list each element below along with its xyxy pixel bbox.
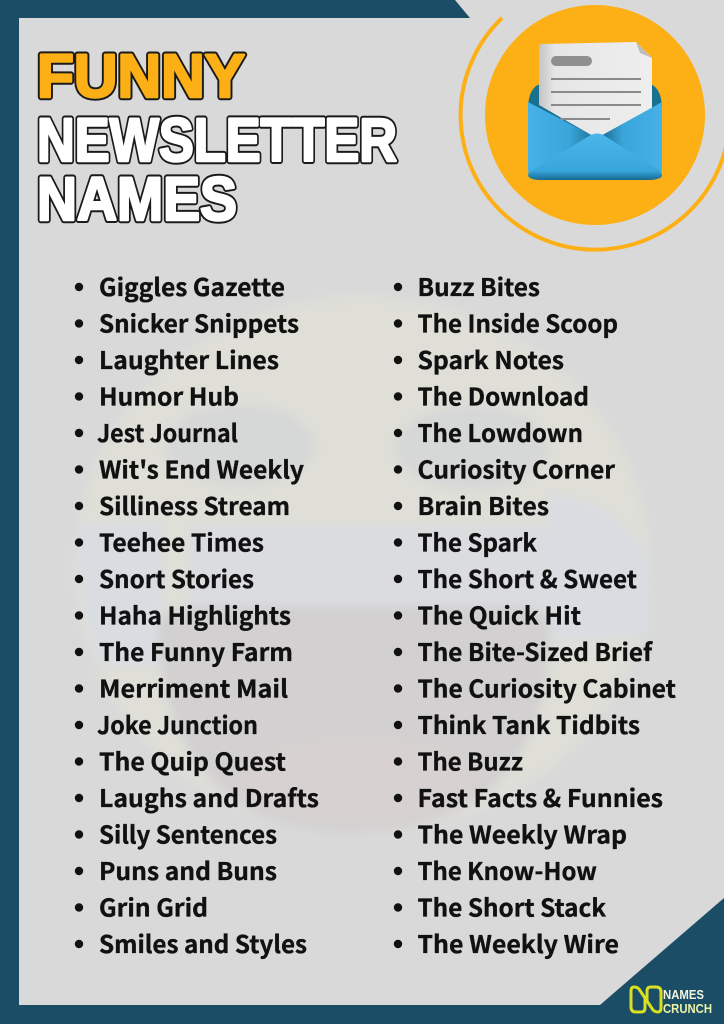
paper — [539, 42, 652, 140]
list: left column: Silly Sentences — [99, 816, 277, 852]
watermark: faint envelope emblem — [75, 297, 649, 833]
list: right column: The Know-How — [418, 853, 597, 888]
orange ring arc — [461, 18, 724, 250]
list: right column: The Buzz — [418, 744, 523, 778]
list: left column: Teehee Times — [99, 524, 264, 560]
list: right column: The Curiosity Cabinet — [418, 670, 676, 706]
list: right column: Curiosity Corner — [418, 452, 615, 486]
envelope front — [528, 134, 662, 180]
list: left column: Giggles Gazette — [99, 269, 285, 304]
envelope back — [528, 84, 662, 140]
list: left column: Haha Highlights — [99, 598, 291, 632]
title word: Funny: FUNNY — [37, 42, 245, 110]
title outlines — [37, 42, 397, 233]
logo: Names Crunch — [631, 987, 712, 1016]
list: left column: Snicker Snippets — [99, 306, 299, 340]
icon: newsletter envelope in orange circle — [461, 5, 724, 250]
list: left column: Joke Junction — [97, 707, 258, 742]
list: right column: The Lowdown — [418, 415, 583, 450]
list: left column — [75, 269, 319, 961]
title outlines: FUNNY — [37, 42, 245, 110]
title outlines: NAMES — [37, 165, 237, 233]
list: left column: The Quip Quest — [99, 744, 286, 778]
title outlines: NEWSLETTER — [37, 106, 397, 174]
list: left column: Merriment Mail — [99, 670, 288, 706]
list: right column: Think Tank Tidbits — [418, 707, 640, 742]
list: left column: Grin Grid — [99, 890, 208, 924]
envelope left flap — [528, 102, 597, 176]
list: right column: The Short & Sweet — [418, 561, 637, 596]
list: right column: The Spark — [418, 524, 537, 560]
list: right column: The Download — [418, 378, 589, 414]
list: left column: Jest Journal — [97, 415, 238, 450]
list: right column: Buzz Bites — [418, 269, 540, 304]
list: left column: Laughs and Drafts — [99, 780, 319, 815]
title word: Names: NAMES — [37, 165, 237, 233]
list: left column: Wit's End Weekly — [99, 452, 304, 486]
title — [37, 42, 397, 233]
list: left column: Humor Hub — [99, 378, 239, 414]
logo: Names Crunch: CRUNCH — [663, 1001, 712, 1016]
list: left column: The Funny Farm — [99, 634, 293, 669]
list: right column: The Short Stack — [418, 890, 606, 924]
list: left column: Puns and Buns — [99, 853, 277, 888]
list: right column: Spark Notes — [418, 342, 564, 377]
title word: Newsletter: NEWSLETTER — [37, 106, 397, 174]
list: right column: The Inside Scoop — [418, 306, 618, 340]
list: left column: Smiles and Styles — [99, 926, 307, 961]
list: right column: The Weekly Wire — [418, 926, 619, 961]
orange circle — [485, 5, 705, 225]
envelope right flap — [597, 102, 662, 176]
list: left column: Snort Stories — [99, 561, 254, 596]
list: right column — [394, 269, 676, 961]
list: right column: Fast Facts & Funnies — [418, 780, 663, 815]
logo wordmark: NAMES — [663, 987, 704, 1002]
list: right column: The Bite-Sized Brief — [418, 634, 653, 669]
list: right column: The Quick Hit — [418, 598, 581, 632]
list: left column: Silliness Stream — [99, 488, 290, 523]
logo mark — [631, 987, 661, 1012]
list: right column: The Weekly Wrap — [418, 816, 627, 852]
list: left column: Laughter Lines — [99, 342, 279, 377]
list: right column: Brain Bites — [418, 488, 549, 523]
